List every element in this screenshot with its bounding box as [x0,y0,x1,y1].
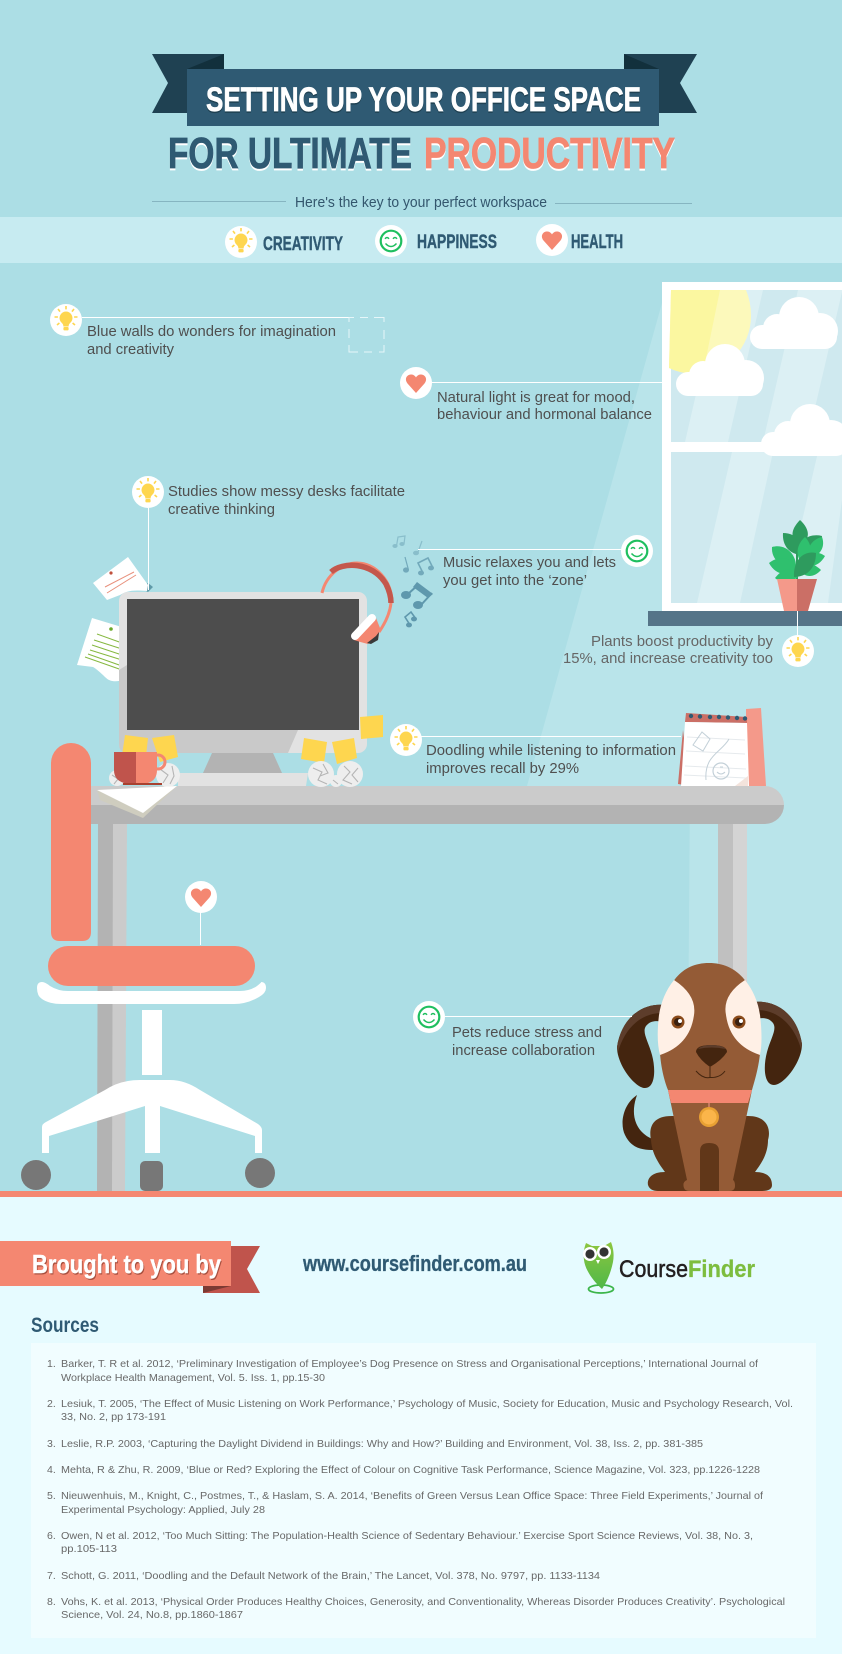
callout: pets: Pets reduce stress and [452,1024,602,1041]
desk top [91,786,784,824]
chair [21,743,275,1191]
source 7: Schott, G. 2011, ‘Doodling and the Default Network of the Brain,’ The Lancet, Vol. 378, No. 9797, pp. 1133-1134 [61,1570,600,1582]
callout: blue walls: and creativity [87,341,174,358]
collar [668,1090,752,1103]
title line 2 [168,129,675,180]
callout: natural light: Natural light is great for mood, [437,389,635,406]
logo text: Course [619,1256,688,1283]
subtitle: Here's the key to your perfect workspace [295,195,547,211]
source 6: Owen, N et al. 2012, ‘Too Much Sitting: The Population-Health Science of Sedentary Behaviour.’ Exercise Sport Science Reviews, Vol. 38, No. 3, [61,1530,753,1542]
source 5: Nieuwenhuis, M., Knight, C., Postmes, T., & Haslam, S. A. 2014, ‘Benefits of Green Versus Lean Office Space: Three Field Experiments,’ Journal of [61,1490,763,1502]
collar tag [699,1103,719,1127]
legend: creativity: CREATIVITY [263,234,343,255]
chair back [51,743,91,941]
eye patches [658,980,762,1055]
callout: doodling [390,724,681,777]
source 2: 33, No. 2, pp 173-191 [61,1411,166,1423]
monitor stand [203,753,282,773]
source 1: Workplace Health Management, Vol. 5. Iss. 1, pp.15-30 [61,1372,325,1384]
dog [617,963,802,1191]
coffee cup [114,752,165,785]
source 8: 8. [47,1596,56,1608]
callout: plants: 15%, and increase creativity too [563,650,773,667]
logo text: Finder [688,1256,755,1283]
clouds [676,297,842,456]
paper notes behind monitor [77,557,153,681]
right ear [755,1002,802,1085]
title line 1: SETTING UP YOUR OFFICE SPACE [206,81,641,119]
source 2: 2. [47,1398,56,1410]
eyes [672,1016,746,1028]
source 8: Science, Vol. 24, No.8, pp.1860-1867 [61,1609,243,1621]
floor [0,1191,842,1197]
title line 2: FOR ULTIMATE [168,131,412,180]
source 8: Vohs, K. et al. 2013, ‘Physical Order Produces Healthy Choices, Generosity, and Conventionality, Whereas Disorder Produces Creativity’. Psychological [61,1596,785,1608]
title line 2: FOR ULTIMATE [168,129,412,178]
callout: plants [563,611,814,667]
title line 2: PRODUCTIVITY [424,129,675,178]
sun [669,290,751,374]
callout: pets: increase collaboration [452,1042,595,1059]
desk calendar [678,708,766,786]
legend: health [536,224,623,256]
callout: messy desks [132,476,405,590]
callout: doodling: Doodling while listening to information [426,742,676,759]
sticky notes [122,715,383,764]
left ear [617,1005,664,1088]
front leg [700,1143,719,1191]
sources panel [31,1343,816,1638]
source 5: 5. [47,1490,56,1502]
callout: doodling: improves recall by 29% [426,760,579,777]
source 1: 1. [47,1358,56,1370]
callout: blue walls [50,304,384,358]
callout: chair heart [185,881,217,945]
note with green lines [77,618,125,681]
source 6: 6. [47,1530,56,1542]
source 3: Leslie, R.P. 2003, ‘Capturing the Daylight Dividend in Buildings: Why and How?’ Building and Environment, Vol. 38, Iss. 2, pp. 381-385 [61,1438,703,1450]
plant [769,520,825,611]
source 4: Mehta, R & Zhu, R. 2009, ‘Blue or Red? Exploring the Effect of Colour on Cognitive Task Performance, Science Magazine, Vol. 323, pp.1226-1228 [61,1464,760,1476]
callout: music: you get into the ‘zone’ [443,572,587,589]
callout: messy desks: Studies show messy desks facilitate [168,483,405,500]
source 8 [47,1596,785,1621]
logo [583,1242,755,1293]
callout: messy desks: creative thinking [168,501,275,518]
website url: www.coursefinder.com.au [302,1251,527,1276]
legend: creativity [225,226,343,258]
source 2: Lesiuk, T. 2005, ‘The Effect of Music Listening on Work Performance,’ Psychology of Music, Society for Education, Music and Psychology Research, Vol. [61,1398,793,1410]
icon: owl [583,1242,614,1293]
small notes [392,536,422,555]
screen [127,599,359,730]
callout: music: Music relaxes you and lets [443,554,616,571]
footer background [0,1197,842,1654]
title line 1: SETTING UP YOUR OFFICE SPACE [206,82,641,120]
legend: health: HEALTH [571,232,623,253]
title line 2: PRODUCTIVITY [424,131,675,180]
window sill [648,611,842,626]
big note [401,582,433,609]
callout: natural light: behaviour and hormonal balance [437,406,652,423]
dog body and head [660,963,761,1191]
callout: pets [413,1001,632,1059]
chair post [142,1010,162,1075]
light beam [527,282,842,1191]
chair base [42,1080,262,1153]
haunches [648,1116,772,1191]
brought to you by ribbon: Brought to you by [33,1250,222,1280]
callout: music [418,535,653,589]
nose and mouth [696,1045,727,1078]
source 5: Experimental Psychology: Applied, July 28 [61,1504,265,1516]
desk legs [97,824,747,1191]
source 3: 3. [47,1438,56,1450]
lower note [405,612,417,627]
source 1 [47,1358,758,1384]
callout: plants: Plants boost productivity by [591,633,773,650]
tail [623,1095,657,1150]
notebook [97,786,177,818]
legend: happiness [375,225,497,257]
legend band [0,217,842,263]
logo text [619,1256,755,1283]
monitor [119,592,367,786]
chair seat plate [37,982,266,1004]
title ribbon [152,54,697,126]
callout: natural light [400,367,662,423]
sources heading: Sources [31,1314,99,1337]
crumpled paper [109,761,363,787]
source 6 [47,1530,753,1555]
brought to you by ribbon [0,1241,260,1293]
legend: happiness: HAPPINESS [417,232,497,253]
window [648,282,842,626]
callout: blue walls: Blue walls do wonders for imagination [87,323,336,340]
source 2 [47,1398,793,1423]
note with red lines [93,557,153,600]
source 5 [47,1490,763,1516]
source 1: Barker, T. R et al. 2012, ‘Preliminary Investigation of Employee’s Dog Presence on Stress and Organisational Perceptions,’ International Journal of [61,1358,758,1370]
source 7: 7. [47,1570,56,1582]
source 4: 4. [47,1464,56,1476]
headphones [322,563,392,644]
brought to you by ribbon: Brought to you by [32,1249,221,1279]
source 6: pp.105-113 [61,1543,117,1555]
music notes [392,536,434,627]
monitor base [178,773,308,786]
chair seat [48,946,255,986]
wheels [21,1158,275,1191]
